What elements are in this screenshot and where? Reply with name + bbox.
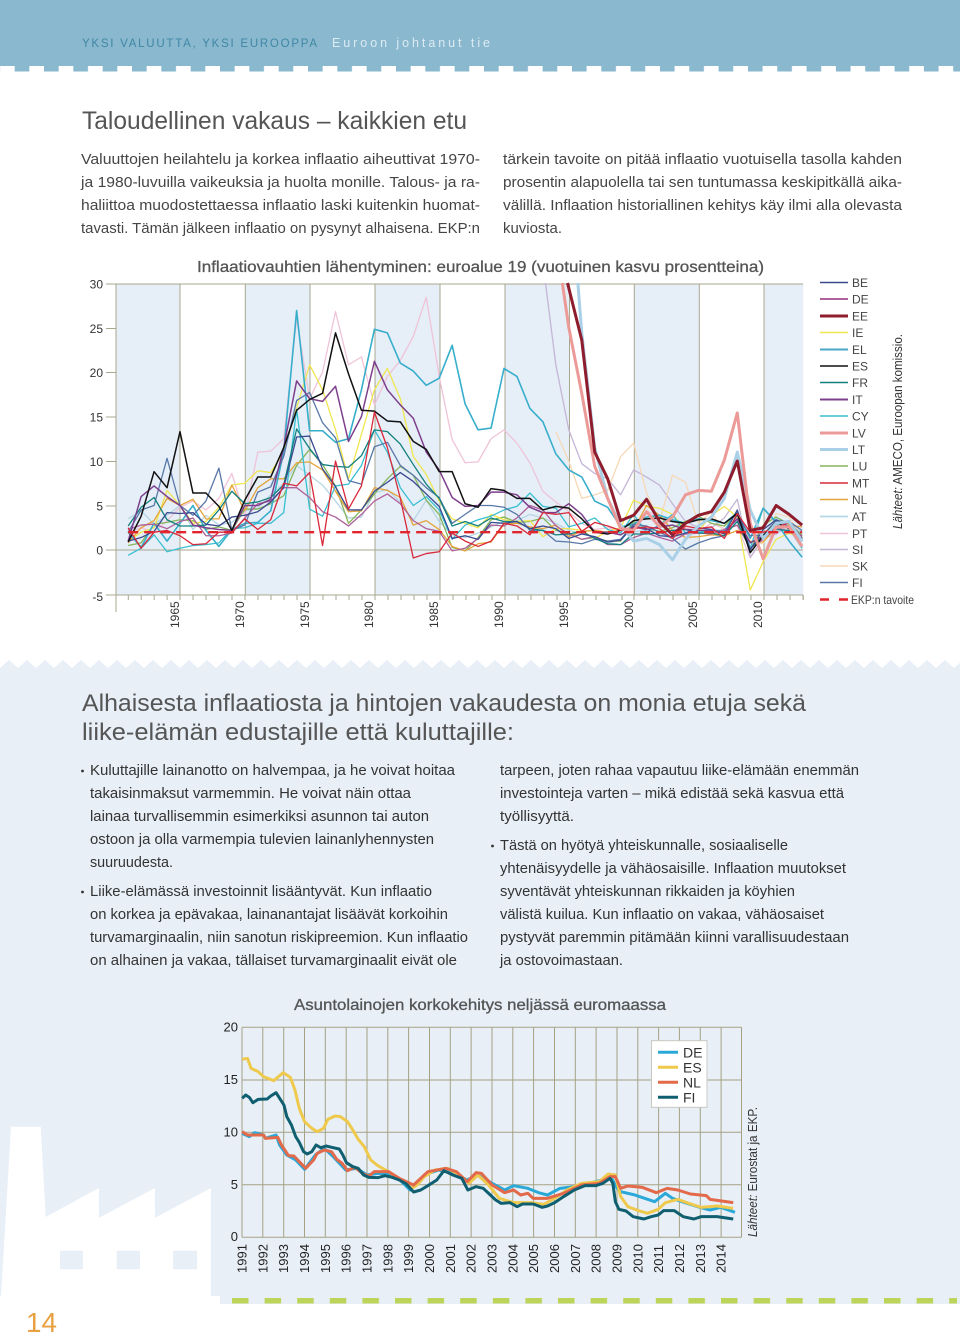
mortgage chart y axis labels: 10	[224, 1124, 238, 1140]
benefits text left column: on alhainen ja vakaa, tällaiset turvamarginaalit eivät ole	[90, 953, 457, 969]
panel heading	[82, 690, 807, 746]
inflation chart legend: LU	[852, 460, 867, 474]
ECB target dashed line	[128, 531, 802, 533]
intro text right column: kuviosta.	[503, 220, 562, 237]
inflation chart x axis labels: 1980	[362, 601, 376, 628]
inflation chart legend: SK	[852, 560, 868, 574]
benefits text right column: tarpeen, joten rahaa vapautuu liike-elämään enemmän	[500, 763, 859, 779]
mortgage chart y axis labels	[224, 1020, 238, 1244]
benefits text right column: työllisyyttä.	[500, 809, 574, 825]
inflation chart x axis labels: 1995	[557, 601, 571, 628]
inflation chart y axis labels	[90, 278, 103, 604]
mortgage rate chart	[224, 997, 760, 1273]
mortgage chart x axis labels: 1997	[360, 1244, 374, 1273]
panel heading: Alhaisesta inflaatiosta ja hintojen vakaudesta on monia etuja sekä	[82, 690, 807, 717]
mortgage chart x axis labels: 2010	[630, 1244, 645, 1273]
benefits text right column: Tästä on hyötyä yhteiskunnalle, sosiaaliselle	[500, 838, 788, 854]
benefits text left column: takaisinmaksut varmemmin. He voivat näin ottaa	[90, 786, 412, 802]
inflation chart x axis labels	[168, 601, 765, 628]
mortgage chart x axis labels: 1996	[339, 1244, 354, 1273]
mortgage chart y axis labels: 20	[224, 1020, 238, 1034]
inflation chart x axis labels: 1970	[233, 601, 247, 628]
inflation chart legend: DE	[852, 292, 869, 306]
intro text right column: tärkein tavoite on pitää inflaatio vuotuisella tasolla kahden	[503, 151, 902, 168]
mortgage rate series lines	[242, 1058, 735, 1219]
benefits text right column: syventävät yhteiskunnan rikkaiden ja köyhien	[500, 884, 795, 900]
inflation chart legend: EE	[852, 310, 868, 324]
inflation chart y axis labels: 10	[90, 455, 103, 469]
mortgage chart source: Lähteet: Eurostat ja EKP.	[746, 1107, 760, 1237]
mortgage chart legend: DE	[683, 1044, 702, 1060]
benefits text right column	[491, 763, 859, 969]
mortgage chart x axis labels: 1994	[297, 1244, 312, 1273]
benefits text left column: suuruudesta.	[90, 855, 173, 871]
mortgage chart x axis labels: 1999	[401, 1244, 416, 1273]
inflation chart legend: MT	[852, 476, 870, 490]
inflation chart x axis labels: 1985	[427, 601, 441, 628]
mortgage chart x axis labels: 2011	[651, 1245, 666, 1273]
mortgage chart x axis labels: 2000	[422, 1244, 437, 1273]
benefits text left column: Liike-elämässä investoinnit lisääntyvät. Kun inflaatio	[90, 884, 432, 900]
mortgage chart legend: NL	[683, 1074, 701, 1090]
inflation chart legend: FI	[852, 576, 863, 590]
Baltic thick series lines	[128, 283, 802, 560]
inflation chart legend: SI	[852, 543, 863, 557]
mortgage chart x axis labels: 2006	[547, 1244, 562, 1273]
inflation chart legend: AT	[852, 510, 867, 524]
mortgage chart x axis labels: 2013	[693, 1244, 708, 1273]
icon: factory silhouette	[1, 1127, 211, 1296]
intro text left column: tavasti. Tämän jälkeen inflaatio on pysynyt alhaisena. EKP:n	[81, 220, 480, 237]
mortgage chart legend: FI	[683, 1090, 695, 1106]
inflation chart y axis labels: 0	[96, 544, 103, 558]
inflation chart legend: NL	[852, 493, 868, 507]
inflation chart y axis labels: 30	[90, 278, 103, 292]
benefits text right column: yhtenäisyydelle ja vähäosaisille. Inflaation muutokset	[500, 861, 846, 877]
mortgage chart x axis labels: 2012	[672, 1244, 687, 1273]
inflation chart y axis labels: 15	[90, 410, 103, 424]
inflation chart legend: IT	[852, 393, 863, 407]
inflation chart legend: LT	[852, 443, 866, 457]
benefits text right column: ja ostovoimastaan.	[499, 953, 623, 969]
intro text left column: Valuuttojen heilahtelu ja korkea inflaatio aiheuttivat 1970-	[81, 151, 480, 168]
inflation chart legend: FR	[852, 376, 868, 390]
inflation chart y axis labels: 20	[90, 366, 103, 380]
mortgage chart x axis labels: 2008	[589, 1244, 604, 1273]
inflation chart legend	[820, 276, 914, 607]
inflation chart y axis labels: 5	[96, 500, 103, 514]
inflation chart legend: EKP:n tavoite	[851, 593, 914, 607]
page header band	[0, 0, 960, 72]
benefits text right column: investointeja varten – mikä edistää sekä kasvua että	[500, 786, 845, 802]
inflation chart legend: LV	[852, 426, 866, 440]
benefits text left column: Kuluttajille lainanotto on halvempaa, ja he voivat hoitaa	[90, 763, 456, 779]
intro text right column	[503, 151, 903, 237]
page number: 14	[26, 1307, 57, 1338]
benefits text left column: on korkea ja epävakaa, lainanantajat lisäävät korkoihin	[90, 907, 448, 923]
inflation chart title: Inflaatiovauhtien lähentyminen: euroalue 19 (vuotuinen kasvu prosentteina)	[197, 259, 764, 276]
lower light blue panel	[0, 660, 960, 1304]
mortgage chart y axis labels: 15	[224, 1072, 238, 1087]
inflation chart legend: CY	[852, 410, 869, 424]
intro text left column: haliittoa muodostettaessa inflaatio laski kuitenkin huomat-	[81, 197, 480, 214]
inflation chart legend: BE	[852, 276, 868, 290]
panel heading: liike-elämän edustajille että kuluttajille:	[82, 719, 514, 746]
inflation chart source: Lähteet: AMECO, Euroopan komissio.	[891, 334, 905, 529]
mortgage chart title: Asuntolainojen korkokehitys neljässä euromaassa	[294, 997, 666, 1014]
inflation chart x axis labels: 1975	[298, 601, 312, 628]
inflation chart x axis labels: 2000	[622, 601, 636, 628]
mortgage chart x axis labels: 1993	[276, 1244, 291, 1273]
inflation chart legend: PT	[852, 527, 868, 541]
intro text right column: välillä. Inflaation historiallinen kehitys käy ilmi alla olevasta	[503, 197, 903, 214]
inflation chart legend: ES	[852, 360, 868, 374]
benefits text left column: lainaa turvallisemmin esimerkiksi asunnon tai auton	[90, 809, 429, 825]
title: Taloudellinen vakaus – kaikkien etu	[82, 107, 467, 135]
inflation chart y axis labels: -5	[92, 590, 103, 604]
mortgage chart x axis labels: 2005	[526, 1244, 541, 1273]
intro text left column	[80, 151, 480, 237]
inflation chart legend: IE	[852, 326, 863, 340]
header section label: YKSI VALUUTTA, YKSI EUROOPPA	[82, 38, 317, 50]
inflation chart x axis labels: 1965	[168, 601, 182, 628]
inflation chart x axis labels: 1990	[492, 601, 506, 628]
mortgage chart x axis labels: 2007	[568, 1244, 583, 1273]
mortgage chart x axis labels: 1995	[318, 1244, 333, 1273]
mortgage chart x axis labels: 2003	[484, 1244, 500, 1273]
benefits text left column: turvamarginaalin, niin sanotun riskipreemion. Kun inflaatio	[90, 930, 468, 946]
benefits text right column: välistä kuilua. Kun inflaatio on vakaa, vähäosaiset	[500, 907, 824, 923]
mortgage chart x axis labels: 2002	[464, 1244, 479, 1273]
mortgage chart x axis labels	[234, 1244, 729, 1273]
mortgage chart y axis labels: 0	[231, 1229, 238, 1244]
mortgage chart x axis labels: 2001	[443, 1244, 458, 1273]
mortgage chart legend: ES	[683, 1060, 702, 1076]
mortgage chart x axis labels: 2014	[714, 1244, 729, 1273]
mortgage chart y axis labels: 5	[231, 1177, 238, 1192]
mortgage chart legend	[652, 1041, 707, 1107]
inflation chart x axis labels: 2005	[686, 601, 700, 628]
benefits text left column	[81, 763, 468, 969]
header chapter label: Euroon johtanut tie	[332, 36, 490, 50]
mortgage chart x axis labels: 2004	[505, 1244, 520, 1273]
inflation chart	[90, 259, 914, 628]
mortgage chart x axis labels: 1998	[380, 1244, 395, 1273]
mortgage chart x axis labels: 1992	[255, 1244, 270, 1273]
inflation series lines	[128, 283, 802, 590]
benefits text right column: pystyvät paremmin pitämään kiinni varallisuudestaan	[500, 930, 849, 946]
inflation chart x axis labels: 2010	[751, 601, 765, 628]
benefits text left column: ostoon ja olla varmempia tulevien lainanlyhennysten	[90, 832, 434, 848]
mortgage chart x axis labels: 1991	[234, 1244, 250, 1273]
inflation chart legend: EL	[852, 343, 867, 357]
mortgage chart x axis labels: 2009	[610, 1244, 624, 1273]
intro text right column: prosentin alapuolella tai sen tuntumassa keskipitkällä aika-	[503, 174, 902, 191]
inflation chart y axis labels: 25	[90, 322, 103, 336]
intro text left column: ja 1980-luvuilla vaikeuksia ja huolta monille. Talous- ja ra-	[80, 174, 480, 191]
